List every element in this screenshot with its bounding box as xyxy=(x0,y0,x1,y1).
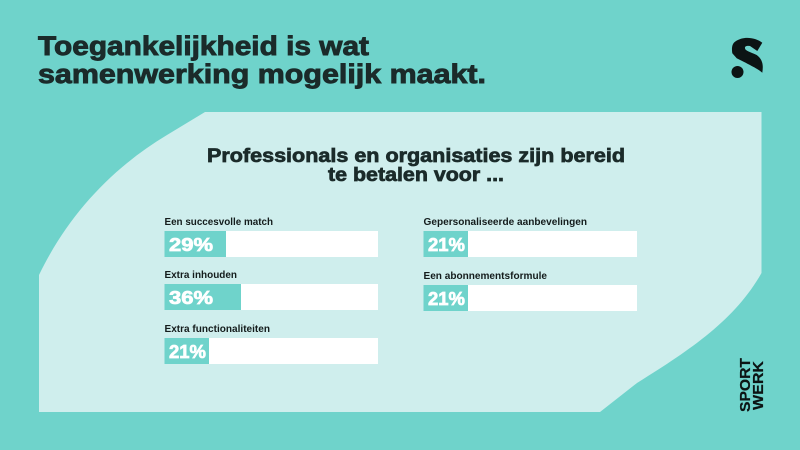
bar: Een abonnementsformule 21% xyxy=(424,270,637,311)
bar: Gepersonaliseerde aanbevelingen 21% xyxy=(424,216,637,257)
brand wordmark: Sportwerk xyxy=(737,358,767,412)
bar: Extra functionaliteiten 21%: Extra functionaliteiten xyxy=(164,323,270,335)
bar: Extra functionaliteiten 21%: 21% xyxy=(169,342,206,362)
bar: Een succesvolle match 29% xyxy=(164,216,378,257)
icon: S logo xyxy=(732,38,763,78)
bar: Extra inhouden 36% xyxy=(164,269,378,310)
panel heading: te betalen voor ... xyxy=(328,165,504,186)
bar: Een succesvolle match 29%: Een succesvolle match xyxy=(164,216,273,228)
title: samenwerking mogelijk maakt. xyxy=(38,59,486,89)
panel background xyxy=(39,112,762,412)
bar: Extra functionaliteiten 21% xyxy=(164,323,378,364)
bar: Een abonnementsformule 21%: Een abonnementsformule xyxy=(424,270,547,282)
bar: Extra inhouden 36%: Extra inhouden xyxy=(164,269,237,281)
title: Toegankelijkheid is wat xyxy=(38,31,369,61)
brand wordmark: Sportwerk: WERK xyxy=(750,361,767,410)
panel: survey results xyxy=(39,112,762,412)
brand wordmark: Sportwerk: SPORT xyxy=(737,358,754,412)
bar: Gepersonaliseerde aanbevelingen 21%: 21% xyxy=(428,235,465,255)
bar: Een succesvolle match 29%: 29% xyxy=(169,235,213,255)
bar: Gepersonaliseerde aanbevelingen 21%: Gepersonaliseerde aanbevelingen xyxy=(424,216,587,228)
bar: Extra inhouden 36%: 36% xyxy=(169,288,213,308)
title xyxy=(38,31,486,89)
panel heading: Professionals en organisaties zijn bereid xyxy=(207,146,625,167)
panel heading xyxy=(207,146,625,186)
bar: Een abonnementsformule 21%: 21% xyxy=(428,289,465,309)
